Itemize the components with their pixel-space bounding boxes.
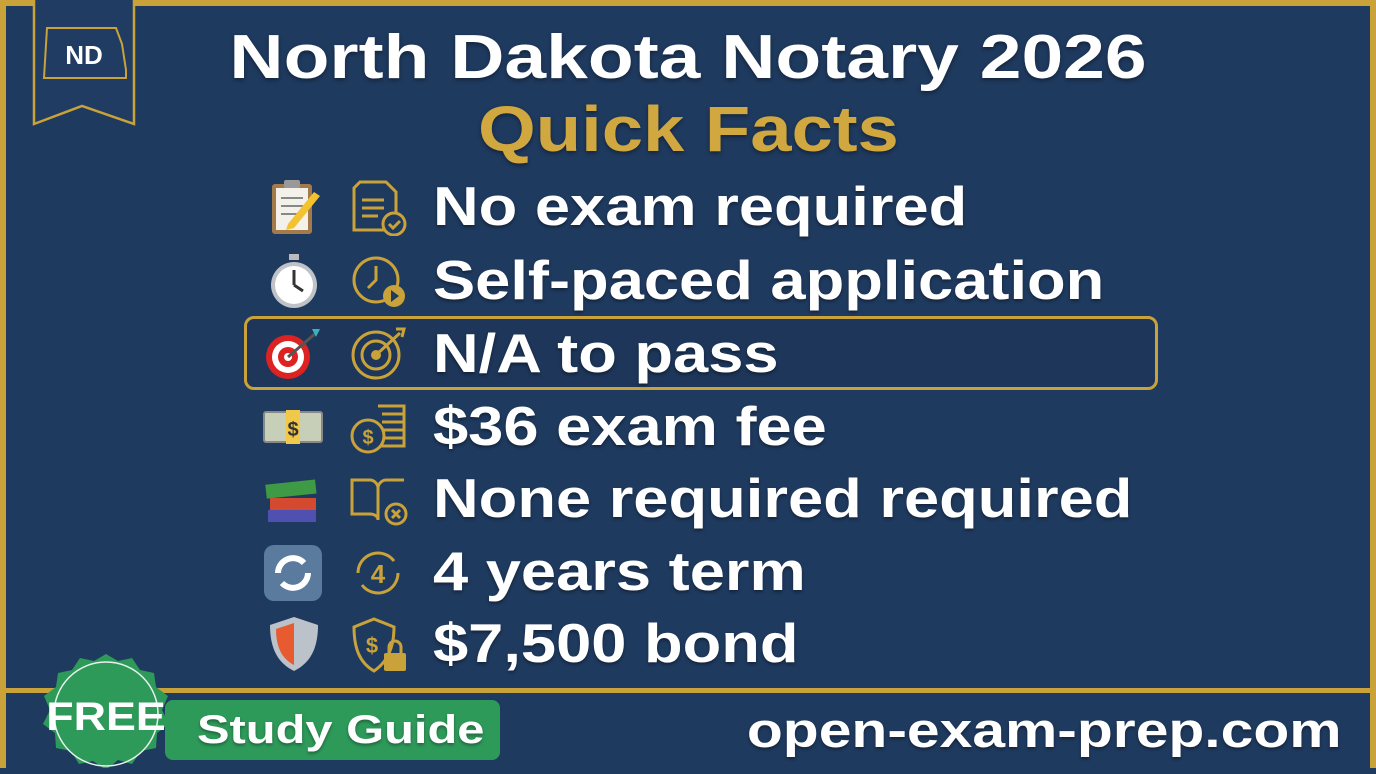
- fact row 7: bond: [270, 612, 799, 674]
- fact row 4: fee: $: [362, 427, 374, 449]
- fact row 2: pace: Self-paced application: [433, 249, 1104, 311]
- fact row 7: bond: $: [366, 633, 378, 658]
- fact row 5: textbook: None required required: [433, 467, 1132, 529]
- fact row 7: bond: $7,500 bond: [433, 612, 799, 674]
- title: North Dakota Notary 2026: [229, 23, 1147, 92]
- fact row 1: exam: No exam required: [433, 175, 967, 237]
- fact row 4: fee: $36 exam fee: [433, 395, 827, 457]
- footer: website: open-exam-prep.com: [747, 704, 1342, 758]
- fact row 3: pass: N/A to pass: [433, 322, 779, 384]
- badge: ND ribbon: ND: [65, 40, 103, 70]
- fact row 6: term: [264, 540, 806, 604]
- fact row 4: fee: $: [287, 419, 299, 441]
- footer divider: [0, 688, 1376, 693]
- subtitle: Quick Facts: [478, 93, 898, 165]
- footer: study guide pill: Study Guide: [197, 708, 484, 752]
- fact row 3: pass: [266, 322, 779, 388]
- fact row 6: term: 4: [371, 559, 386, 589]
- footer: FREE seal: [43, 654, 168, 768]
- highlight box: [244, 316, 1158, 390]
- footer: FREE seal: FREE: [46, 694, 166, 738]
- footer: study guide pill: [165, 700, 500, 760]
- fact row 6: term: 4 years term: [433, 540, 806, 602]
- fact row 4: fee: [263, 395, 827, 457]
- badge: ND ribbon: [32, 0, 136, 126]
